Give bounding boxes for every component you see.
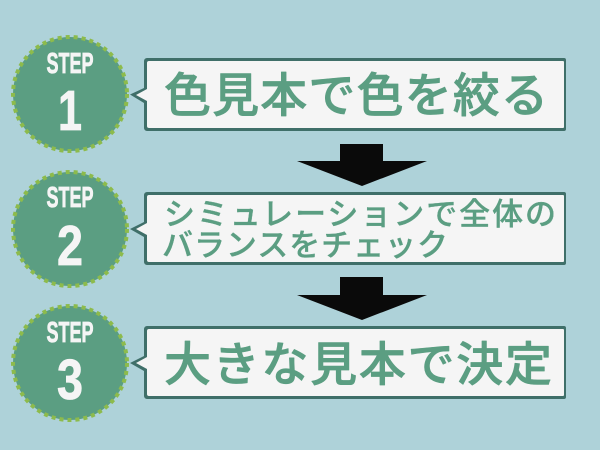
- step 3 badge: [13, 306, 127, 420]
- step 2 callout box: [130, 192, 566, 265]
- step 3 callout box: [130, 326, 566, 399]
- step 1 badge: 1: [58, 79, 82, 143]
- step 3 badge: STEP: [46, 317, 94, 349]
- step 3 callout box: 大きな見本で決定: [164, 338, 552, 391]
- step 1 badge: [13, 37, 127, 151]
- step 2 badge: STEP: [46, 182, 94, 214]
- step 2 callout box: バランスをチェック: [162, 228, 448, 263]
- step 1 group: [13, 37, 566, 151]
- step 3 badge: 3: [57, 348, 83, 412]
- step 3 group: [13, 306, 566, 420]
- step 2 group: [13, 172, 566, 286]
- arrow 1: [297, 144, 427, 186]
- step 1 callout box: 色見本で色を絞る: [164, 69, 548, 122]
- step 1 badge: STEP: [46, 48, 94, 80]
- step 2 badge: [13, 172, 127, 286]
- step 2 badge: 2: [57, 214, 83, 278]
- step 2 callout box: シミュレーションで全体の: [164, 197, 556, 232]
- step 1 callout box: [130, 58, 566, 131]
- arrow 2: [297, 277, 427, 320]
